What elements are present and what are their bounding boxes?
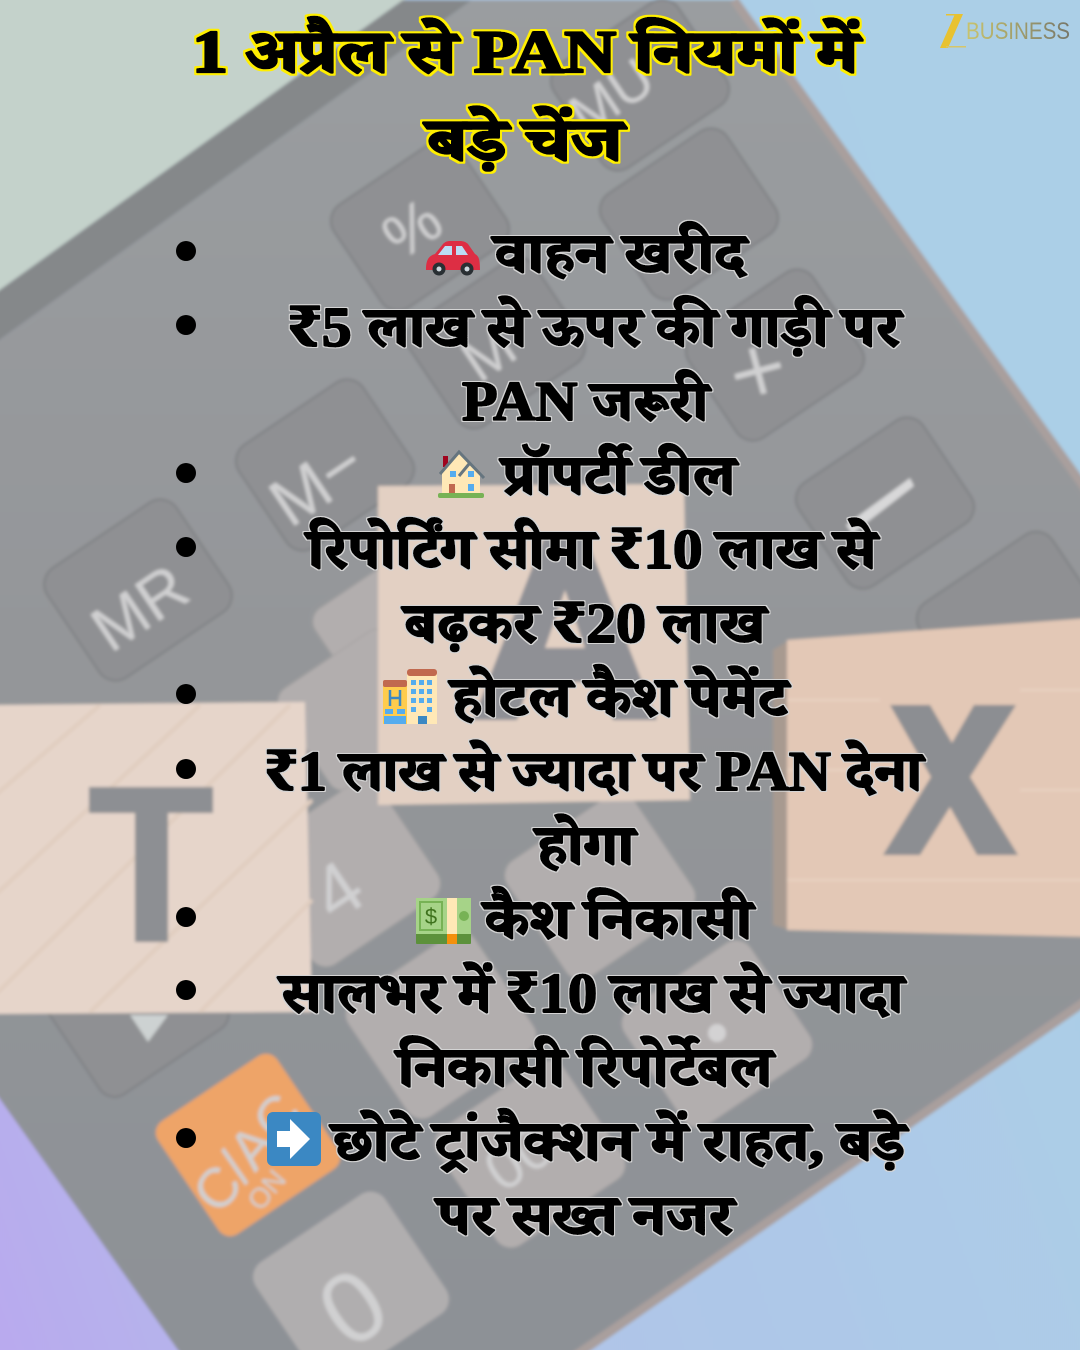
key labels: ×	[704, 326, 810, 415]
list item: property rule line 1: रिपोर्टिंग सीमा ₹10 लाख से	[304, 517, 880, 581]
icon: right arrow	[267, 1112, 321, 1166]
list item: vehicle rule line 2: PAN जरूरी	[462, 369, 712, 433]
list item: cash rule line 1: सालभर में ₹10 लाख से ज्यादा	[277, 962, 907, 1025]
block: T	[0, 702, 312, 1014]
icon: house	[438, 452, 484, 498]
list item: property deal heading: प्रॉपर्टी डील	[499, 443, 739, 507]
key labels: ON	[241, 1164, 292, 1216]
list item: vehicle rule line 1: ₹5 लाख से ऊपर की गाड़ी पर	[288, 295, 904, 359]
block: X	[773, 618, 1080, 937]
key labels	[78, 45, 914, 1350]
list item: vehicle purchase heading: वाहन खरीद	[491, 221, 750, 285]
key labels: C/AC	[180, 1081, 314, 1224]
logo: Z Business	[940, 14, 1070, 48]
calculator rim	[575, 0, 1080, 1350]
list item: cash withdrawal heading: कैश निकासी	[481, 886, 756, 951]
key labels: M	[449, 311, 528, 395]
list item: summary line 2: पर सख्त नजर	[434, 1185, 737, 1247]
icon: hotel	[383, 669, 437, 724]
key labels: 4	[296, 844, 379, 938]
calculator screen	[0, 0, 420, 297]
list item: property rule line 2: बढ़कर ₹20 लाख	[401, 593, 769, 655]
list item: hotel rule line 1: ₹1 लाख से ज्यादा पर PAN देना	[265, 740, 926, 803]
title: 1 अप्रैल से PAN नियमों में	[192, 16, 863, 85]
title: बड़े चेंज	[423, 105, 627, 173]
bullet list	[176, 221, 926, 1247]
list item: cash rule line 2: निकासी रिपोर्टेबल	[394, 1036, 776, 1099]
icon: banknotes	[416, 898, 471, 944]
list item: summary line 1: छोटे ट्रांजैक्शन में राहत, बड़े	[329, 1108, 909, 1173]
key labels: 00	[472, 1112, 565, 1204]
key labels: MU	[557, 45, 665, 146]
icon: banknotes: $	[425, 904, 437, 929]
icon: car	[426, 241, 480, 276]
block: A	[378, 484, 690, 805]
key labels: MR	[78, 550, 201, 665]
key labels: M−	[256, 424, 378, 541]
key labels: %	[370, 185, 455, 273]
list item: hotel cash payment heading: होटल कैश पेमेंट	[448, 664, 791, 729]
list item: hotel rule line 2: होगा	[533, 814, 638, 877]
calculator bezel band	[0, 0, 472, 347]
title	[192, 16, 863, 173]
bullet markers	[176, 241, 196, 1148]
